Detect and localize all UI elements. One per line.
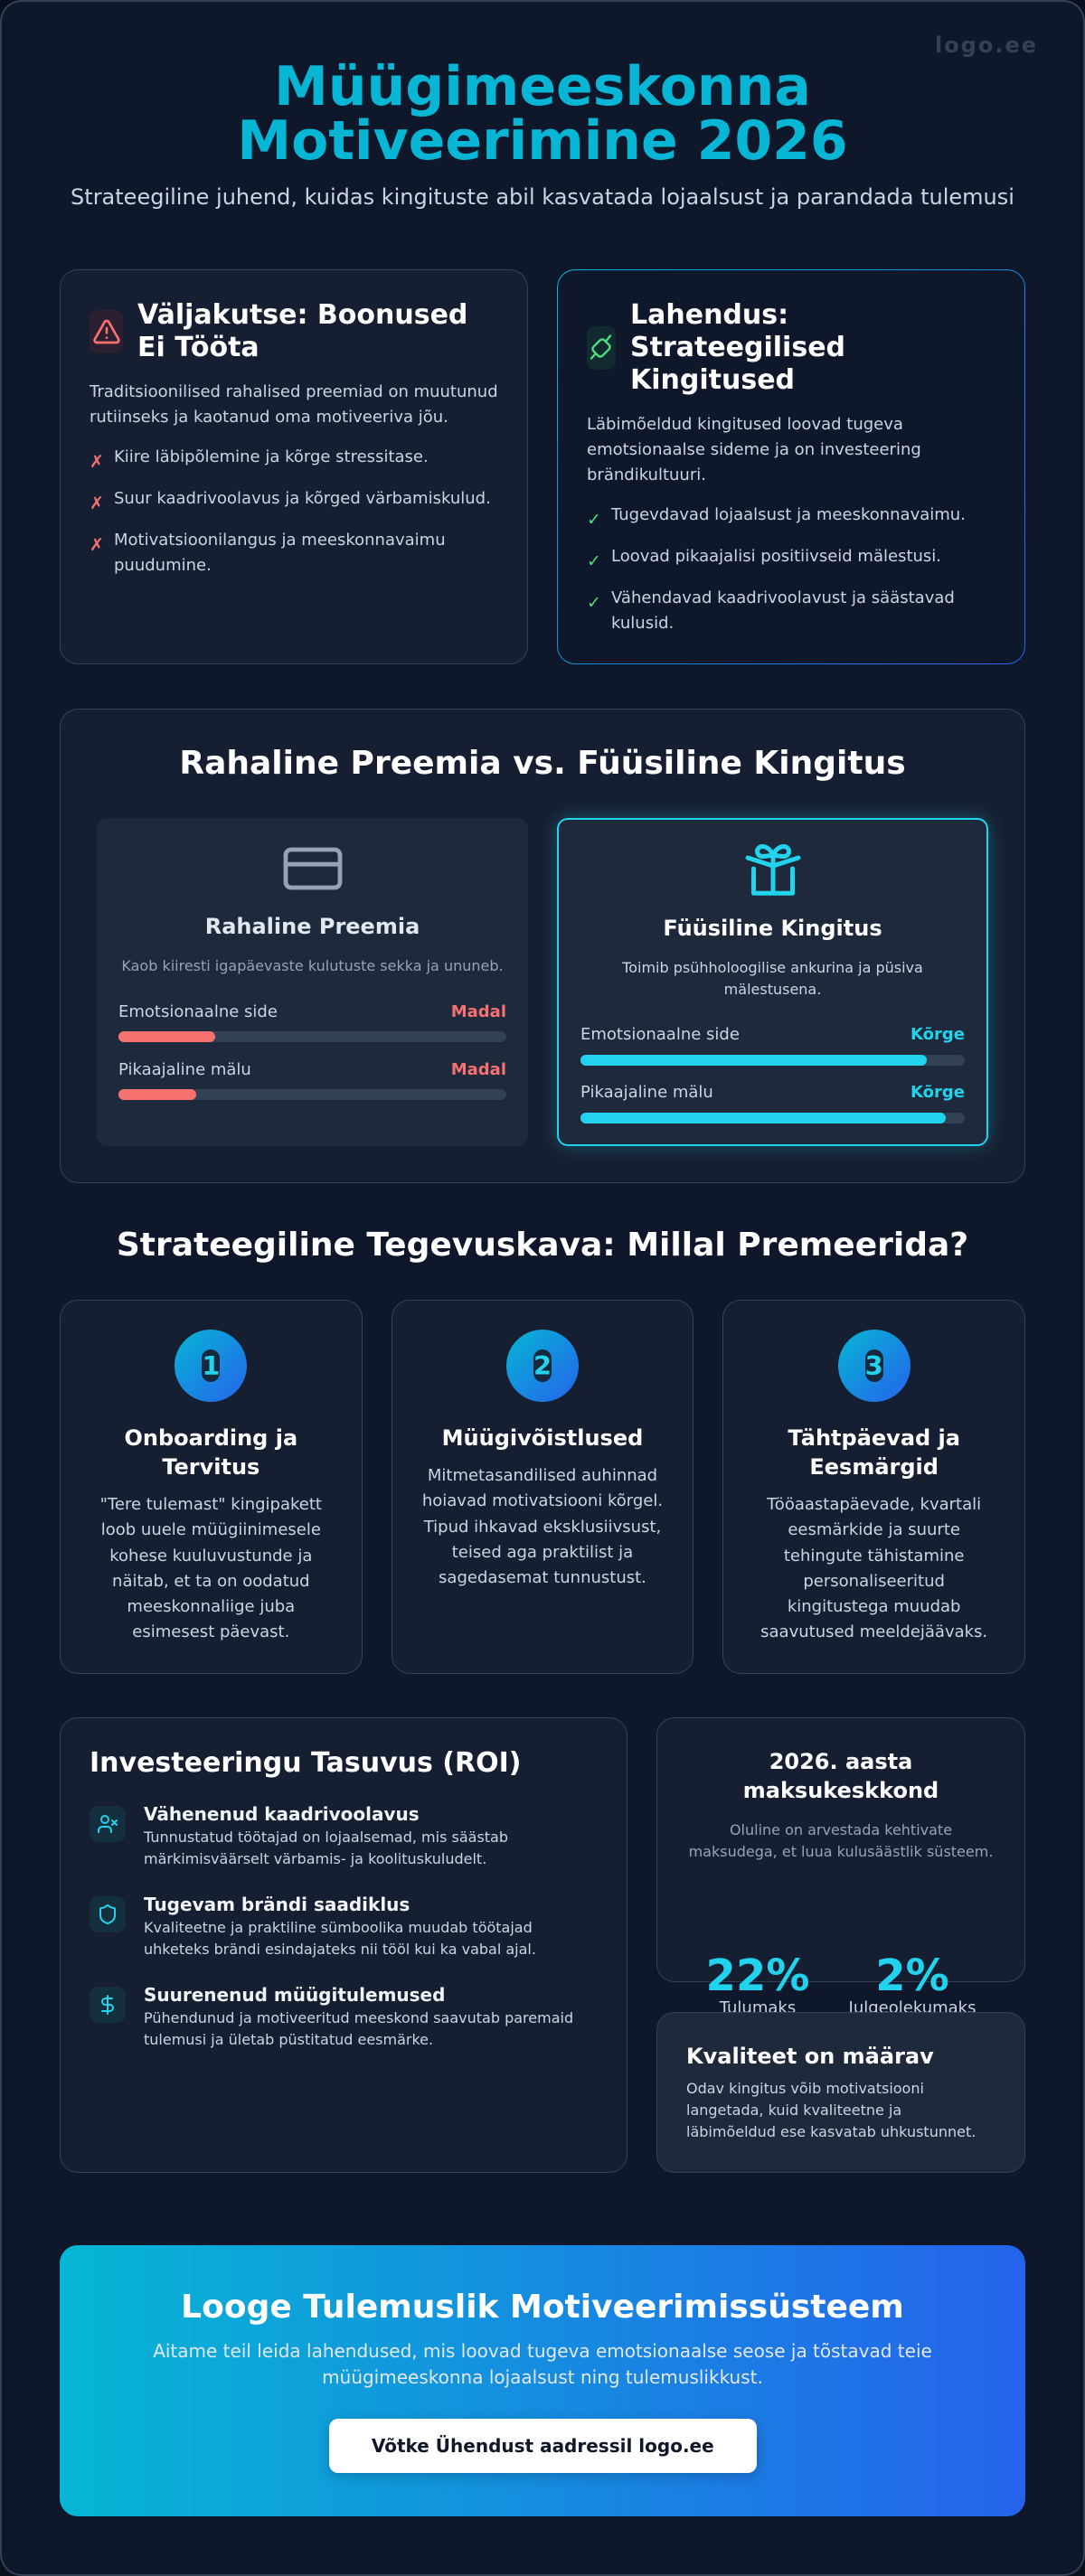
stat: income tax 22%: Tulumaks <box>720 1998 796 2017</box>
icon: plug <box>587 326 616 370</box>
heading: challenge: Väljakutse: Boonused <box>137 299 467 331</box>
meter: long-term memory low: Madal <box>451 1060 506 1079</box>
step 1 text: loob uuele müügiinimesele <box>101 1520 321 1539</box>
step 1 title: Tervitus <box>162 1454 259 1480</box>
step 1 text: kohese kuuluvustunde ja <box>109 1546 312 1565</box>
step 3 text <box>760 1495 987 1641</box>
heading: solution <box>630 299 845 396</box>
meter: emotional bond low <box>118 1002 506 1042</box>
ROI item: brand ambassadors <box>90 1894 536 1958</box>
stat: security tax 2% <box>849 1951 976 2017</box>
step 2 text: Tipud ihkavad eksklusiivsust, <box>424 1517 661 1537</box>
step 1 text: näitab, et ta on oodatud <box>112 1572 310 1591</box>
ROI item: turnover: märkimisväärselt värbamis- ja koolituskuludelt. <box>144 1849 486 1867</box>
gift description <box>622 959 923 998</box>
step number 1: 1 <box>202 1350 220 1381</box>
CTA text: müügimeeskonna lojaalsust ning tulemuslikkust. <box>322 2366 763 2388</box>
solution item 3 <box>587 588 955 633</box>
challenge item 3: ✗ <box>90 535 104 555</box>
meter: emotional bond low: Emotsionaalne side <box>118 1002 278 1021</box>
step 2 text: teised aga praktilist ja <box>452 1543 633 1562</box>
step 2 text <box>422 1466 663 1587</box>
meter: emotional bond high: Emotsionaalne side <box>580 1025 740 1044</box>
heading: solution: Kingitused <box>630 364 795 396</box>
step number 2: 2 <box>533 1350 552 1381</box>
step 3 title <box>788 1425 960 1480</box>
tax heading: 2026. aasta <box>769 1749 912 1774</box>
panel: solution <box>557 269 1025 664</box>
step 3 title: Tähtpäevad ja <box>788 1425 960 1451</box>
meter: long-term memory low: Pikaajaline mälu <box>118 1060 251 1079</box>
panel: ROI <box>60 1717 627 2173</box>
card: cash reward <box>97 818 528 1146</box>
solution item 3: ✓ <box>587 593 601 613</box>
title <box>237 55 848 173</box>
ROI item: turnover: Tunnustatud töötajad on lojaalsemad, mis säästab <box>144 1828 508 1846</box>
challenge item 3 <box>90 530 446 575</box>
step 2 text: sagedasemat tunnustust. <box>439 1568 646 1587</box>
meter: long-term memory high <box>580 1083 965 1123</box>
comparison heading: Rahaline Preemia vs. Füüsiline Kingitus <box>179 745 906 782</box>
challenge item 3: Motivatsioonilangus ja meeskonnavaimu <box>114 530 446 550</box>
step card 2 <box>392 1300 693 1674</box>
solution intro text: Läbimõeldud kingitused loovad tugeva <box>587 414 903 434</box>
step 3 text: personaliseeritud <box>803 1572 945 1591</box>
step 3 text: Tööaastapäevade, kvartali <box>767 1495 981 1514</box>
step number 1 <box>175 1330 247 1402</box>
ROI item: brand ambassadors: Kvaliteetne ja praktiline sümboolika muudab töötajad <box>144 1918 533 1936</box>
ROI item: brand ambassadors: Tugevam brändi saadiklus <box>144 1894 410 1915</box>
heading: challenge: Ei Tööta <box>137 332 259 363</box>
icon: gift <box>745 844 801 896</box>
step 1 text: "Tere tulemast" kingipakett <box>100 1495 322 1514</box>
heading: solution: Strateegilised <box>630 332 845 363</box>
step 1 text: esimesest päevast. <box>132 1622 289 1641</box>
ROI heading: Investeeringu Tasuvus (ROI) <box>90 1746 521 1779</box>
CTA heading: Looge Tulemuslik Motiveerimissüsteem <box>181 2289 904 2325</box>
step 3 text: tehingute tähistamine <box>784 1546 964 1565</box>
panel: call to action <box>60 2245 1025 2516</box>
step 3 title: Eesmärgid <box>809 1454 939 1480</box>
icon: shield <box>90 1896 126 1932</box>
step 1 text: meeskonnaliige juba <box>127 1597 295 1616</box>
solution item 3: kulusid. <box>611 614 674 633</box>
panel: tax environment <box>656 1717 1025 1982</box>
quality text: langetada, kuid kvaliteetne ja <box>686 2101 901 2119</box>
gift description: mälestusena. <box>724 981 821 998</box>
ROI item: sales results: Suurenenud müügitulemused <box>144 1984 445 2006</box>
solution item 2: Loovad pikaajalisi positiivseid mälestusi. <box>611 546 941 566</box>
stat: income tax 22%: 22% <box>706 1951 809 2001</box>
quality text: läbimõeldud ese kasvatab uhkustunnet. <box>686 2123 976 2140</box>
ROI item: sales results: tulemusi ja ületab püstitatud eesmärke. <box>144 2030 433 2048</box>
step 3 text: saavutused meeldejäävaks. <box>760 1622 987 1641</box>
cash reward title: Rahaline Preemia <box>205 914 420 939</box>
CTA text <box>153 2340 932 2388</box>
step number 3: 3 <box>865 1350 883 1381</box>
meter: long-term memory high: Pikaajaline mälu <box>580 1083 713 1102</box>
CTA button <box>329 2419 757 2473</box>
step 3 text: eesmärkide ja suurte <box>788 1520 960 1539</box>
tax description: Oluline on arvestada kehtivate <box>730 1821 952 1838</box>
quality heading: Kvaliteet on määrav <box>686 2043 934 2068</box>
ROI item: sales results <box>90 1984 573 2048</box>
solution item 1: ✓ <box>587 510 601 530</box>
challenge intro text: rutiinseks ja kaotanud oma motiveeriva jõu. <box>90 408 448 427</box>
ROI item: turnover <box>90 1803 508 1867</box>
cash reward description: Kaob kiiresti igapäevaste kulutuste sekka ja ununeb. <box>121 957 504 974</box>
heading: challenge <box>137 299 467 363</box>
title: Motiveerimine 2026 <box>237 109 848 173</box>
tax description: maksudega, et luua kulusäästlik süsteem. <box>689 1843 993 1860</box>
meter: long-term memory high: Kõrge <box>910 1083 965 1102</box>
step 2 title: Müügivõistlused <box>442 1425 643 1451</box>
panel: comparison <box>60 709 1025 1183</box>
step 1 text <box>100 1495 322 1641</box>
tax heading <box>743 1749 939 1803</box>
meter: emotional bond high <box>580 1025 965 1066</box>
panel: challenge <box>60 269 528 664</box>
meter: emotional bond low: Madal <box>451 1002 506 1021</box>
icon: credit card <box>284 848 342 889</box>
challenge intro text: Traditsioonilised rahalised preemiad on muutunud <box>90 381 498 401</box>
stat: security tax 2%: 2% <box>875 1951 949 2001</box>
ROI item: turnover: Vähenenud kaadrivoolavus <box>144 1803 420 1825</box>
panel: quality note <box>656 2012 1025 2173</box>
step number 3 <box>838 1330 910 1402</box>
challenge item 2: ✗ <box>90 494 104 513</box>
step card 1 <box>60 1300 363 1674</box>
solution item 1: Tugevdavad lojaalsust ja meeskonnavaimu. <box>611 505 966 524</box>
stat: security tax 2%: Julgeolekumaks <box>849 1998 976 2017</box>
step card 3 <box>722 1300 1025 1674</box>
solution item 2: ✓ <box>587 551 601 571</box>
subtitle: Strateegiline juhend, kuidas kingituste abil kasvatada lojaalsust ja parandada tulemusi <box>71 184 1014 210</box>
challenge item 2: Suur kaadrivoolavus ja kõrged värbamiskulud. <box>114 488 491 508</box>
gift description: Toimib psühholoogilise ankurina ja püsiva <box>622 959 923 976</box>
title: Müügimeeskonna <box>274 55 811 118</box>
logo: logo.ee <box>935 33 1038 58</box>
icon: user x <box>90 1806 126 1842</box>
challenge item 3: puudumine. <box>114 556 212 575</box>
CTA text: Aitame teil leida lahendused, mis loovad tugeva emotsionaalse seose ja tõstavad teie <box>153 2340 932 2362</box>
step 2 text: Mitmetasandilised auhinnad <box>428 1466 657 1485</box>
step 3 text: kingitustega muudab <box>788 1597 960 1616</box>
heading: solution: Lahendus: <box>630 299 788 331</box>
meter: long-term memory low <box>118 1060 506 1100</box>
quality text <box>686 2080 976 2140</box>
solution intro text <box>587 414 921 484</box>
challenge item 1: ✗ <box>90 452 104 472</box>
step 2 text: hoiavad motivatsiooni kõrgel. <box>422 1491 663 1510</box>
meter: emotional bond high: Kõrge <box>910 1025 965 1044</box>
CTA button: Võtke Ühendust aadressil logo.ee <box>372 2435 714 2457</box>
step number 2 <box>506 1330 579 1402</box>
timeline heading: Strateegiline Tegevuskava: Millal Premeerida? <box>117 1226 968 1264</box>
tax heading: maksukeskkond <box>743 1778 939 1803</box>
solution intro text: emotsionaalse sideme ja on investeering <box>587 440 921 459</box>
solution intro text: brändikultuuri. <box>587 465 706 484</box>
step 1 title <box>125 1425 297 1480</box>
icon: dollar <box>90 1987 126 2023</box>
card: physical gift <box>557 818 988 1146</box>
tax description <box>689 1821 993 1860</box>
step 1 title: Onboarding ja <box>125 1425 297 1451</box>
solution item 3: Vähendavad kaadrivoolavust ja säästavad <box>611 588 955 607</box>
challenge intro text <box>89 381 498 427</box>
gift title: Füüsiline Kingitus <box>663 915 882 940</box>
quality text: Odav kingitus võib motivatsiooni <box>686 2080 924 2097</box>
ROI item: brand ambassadors: uhketeks brändi esindajateks nii tööl kui ka vabal ajal. <box>144 1940 536 1958</box>
challenge item 1: Kiire läbipõlemine ja kõrge stressitase. <box>114 447 429 466</box>
ROI item: sales results: Pühendunud ja motiveeritud meeskond saavutab paremaid <box>144 2008 573 2026</box>
icon: warning triangle <box>90 310 123 353</box>
